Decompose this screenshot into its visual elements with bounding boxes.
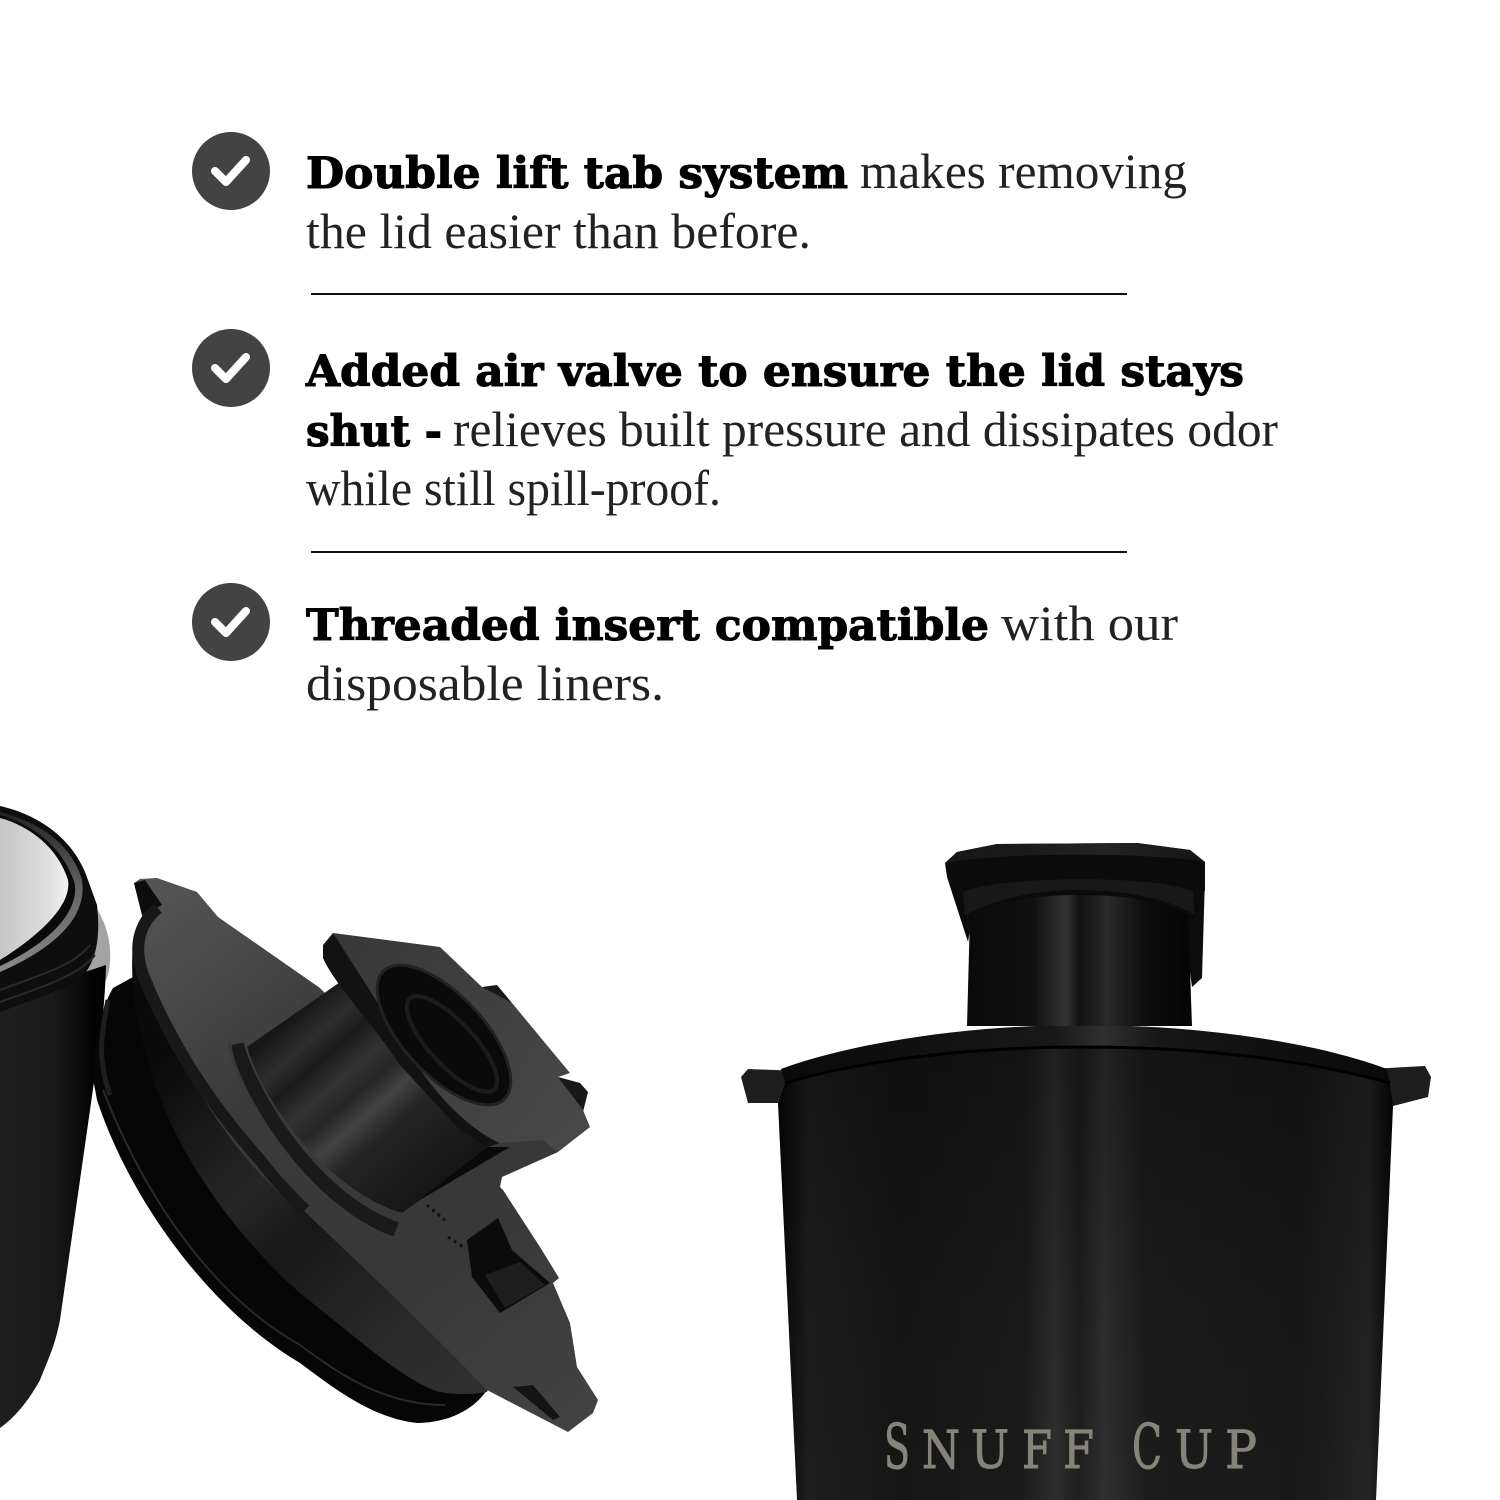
feature 3: threaded insert xyxy=(192,583,1178,711)
lid skirt xyxy=(132,945,500,1394)
product: cropped open cup at left xyxy=(0,806,110,1428)
product: detached lid with spout xyxy=(92,878,598,1432)
text block: feature 3: Threaded insert compatible xyxy=(306,601,989,651)
dark gap under flange xyxy=(402,1147,510,1213)
cup label: F xyxy=(1063,1421,1094,1481)
spout neck xyxy=(967,895,1192,1026)
text block: feature 2: Added air valve to ensure the lid stays xyxy=(305,347,1244,397)
flange opening xyxy=(355,943,533,1127)
lid plate xyxy=(134,878,598,1432)
cup label: S xyxy=(884,1410,910,1483)
lid threaded base xyxy=(92,977,487,1423)
cup label: P xyxy=(1225,1421,1257,1481)
side tab left xyxy=(741,1069,800,1103)
bottom tab detail xyxy=(513,1385,560,1420)
cup label: U xyxy=(971,1421,1009,1481)
cup silver disc xyxy=(0,818,68,960)
flange nubs xyxy=(482,985,588,1112)
text block: feature 2: relieves built pressure and dissipates odor xyxy=(453,401,1278,457)
text block: feature 3 xyxy=(306,595,1178,711)
cup label: F xyxy=(1022,1421,1052,1481)
cup label: U xyxy=(1175,1421,1213,1481)
cap collar xyxy=(963,879,1195,915)
feature 2: added air valve xyxy=(192,329,1278,516)
spout side flap xyxy=(1180,877,1205,987)
spout flange xyxy=(323,933,590,1152)
neck base ring xyxy=(236,1044,396,1230)
flange edge xyxy=(323,933,500,1147)
icon: check badge 3 xyxy=(192,583,270,661)
text block: feature 2: shut - xyxy=(306,407,442,457)
latch mechanism xyxy=(427,1205,550,1313)
cup body xyxy=(778,1047,1393,1500)
icon: check badge 2 xyxy=(192,329,270,407)
neck cylinder xyxy=(247,980,487,1213)
cup label: C xyxy=(1132,1410,1162,1483)
lid tab notch xyxy=(134,880,162,915)
flange face xyxy=(333,933,590,1152)
cup label: N xyxy=(922,1421,960,1481)
lid plate rim xyxy=(138,908,305,1210)
icon: check badge 1 xyxy=(192,132,270,210)
text block: feature 2 xyxy=(305,347,1278,516)
product: assembled cup with lid xyxy=(741,843,1431,1500)
text block: feature 1: makes removing xyxy=(860,143,1187,199)
cup flange xyxy=(85,900,110,995)
cup rim and threads xyxy=(0,806,98,1012)
text block: feature 3: disposable liners. xyxy=(306,655,664,711)
text block: feature 1: the lid easier than before. xyxy=(306,203,811,259)
text block: feature 2: while still spill-proof. xyxy=(306,460,721,516)
side tab right xyxy=(1370,1066,1431,1106)
lid dome xyxy=(781,1025,1390,1083)
cup grey ring xyxy=(0,812,83,972)
cap top band xyxy=(945,843,1205,863)
spout cap xyxy=(945,843,1205,942)
text block: feature 1: Double lift tab system xyxy=(306,149,848,199)
text block: feature 1 xyxy=(306,143,1187,259)
cup body xyxy=(0,965,106,1428)
feature 1: double lift tab system xyxy=(192,132,1187,259)
text block: feature 3: with our xyxy=(1001,595,1178,651)
